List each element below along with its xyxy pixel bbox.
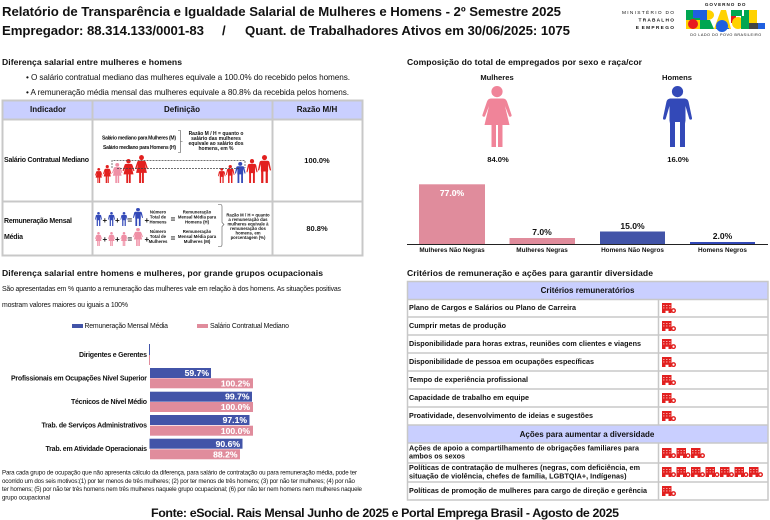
logo: ministério do trabalho e emprego: T R A B A L H O [639,18,674,24]
footnote: ter homens; (5) por não ter três homens nem três mulheres naquele grupo ocupacional; (6) por não ter nem homens nem mulheres naquele [2,486,363,493]
row: remuneração mensal média: Mulheres [149,239,168,244]
values [185,368,250,460]
row: remuneração mensal média: Mensal Média para [178,214,217,220]
row: salário contratual mediano: Salário Contratual Mediano [4,157,89,164]
pictogram: mulheres 84%: 84.0% [487,155,509,164]
legend: Remuneração Mensal Média [84,323,168,330]
table header [30,105,337,114]
row: remuneração mensal média: a remuneração das [228,217,268,222]
values: 100.0% [221,402,250,412]
pictogram: mulheres: + [102,235,108,244]
bar chart: sexo e raça/cor: Mulheres Não Negras [419,247,485,254]
row: remuneração mensal média: Homens (H) [185,220,210,224]
section: diferença salarial: • O salário contratual mediano das mulheres equivale a 100.0% do recebido pelos homens. [26,73,350,82]
section: critérios: Critérios de remuneração e ações para garantir diversidade [407,268,653,278]
bar chart: sexo e raça/cor: 7.0% [532,227,552,237]
values: 90.6% [216,439,240,449]
action rows [409,444,648,495]
table header: Indicador [30,105,66,114]
row: remuneração mensal média: Mulheres (M) [184,239,211,244]
bar chart: sexo e raça/cor: Mulheres Negras [516,247,568,254]
row: remuneração mensal média: Média [4,234,23,241]
criteria rows: Disponibilidade para horas extras, reuniões com clientes e viagens [409,339,641,348]
footnote: grupo ocupacional [2,494,50,502]
section: diferença salarial [2,57,350,97]
pictogram: mulheres 84% [480,73,514,164]
pictogram: mulheres: + [144,235,150,244]
row: remuneração mensal média: Remuneração [183,210,212,214]
pictogram: mulheres 84%: Mulheres [480,73,514,82]
row: remuneração mensal média: Número [150,210,166,214]
criteria rows: Proatividade, desenvolvimento de ideias e sugestões [409,411,593,420]
bar chart: grupos ocupacionais [11,344,253,460]
bar chart: sexo e raça/cor: Homens Negros [698,247,747,254]
bar chart: sexo e raça/cor: 15.0% [620,221,645,231]
pictogram: homens: = [128,216,132,225]
header: critérios remuneratórios: Critérios remuneratórios [541,286,635,295]
row: remuneração mensal média: = [171,234,176,243]
row: salário contratual mediano: 100.0% [304,156,330,165]
action rows: Políticas de promoção de mulheres para cargo de direção e gerência [409,486,648,495]
row: salário contratual mediano: salário das mulheres [191,136,241,142]
icons: ações [662,448,762,496]
section: grupos ocupacionais: São apresentadas em % quanto a remuneração das mulheres vale em relação à dos homens. As situações positivas [2,286,342,293]
bar chart: sexo e raça/cor: Homens Não Negros [601,247,664,254]
footnote: Para cada grupo de ocupação que não apresenta cálculo da diferença, para salário de contratação ou para remuneração média, pode ter [2,470,357,476]
categories: Dirigentes e Gerentes [79,352,147,359]
action rows: Ações de apoio a compartilhamento de obrigações familiares para [409,444,640,452]
pictogram: salários medianos [95,155,271,183]
row: remuneração mensal média: porcentagem (%) [231,235,266,240]
pictogram: homens [95,208,150,226]
row: remuneração mensal média: mulheres equivale à [227,222,269,226]
bar chart: sexo e raça/cor [407,184,768,254]
row: salário contratual mediano: Salário mediano para Mulheres (M) [102,136,176,142]
section: diferença salarial: • A remuneração média mensal das mulheres equivale a 80.8% da recebida pelos homens. [26,88,349,97]
action rows: situação de violência, chefes de família, LGBTQIA+, Indígenas) [409,472,627,480]
row: salário contratual mediano: Salário mediano para Homens (H) [103,145,176,151]
criteria rows: Tempo de experiência profissional [409,375,528,384]
row: remuneração mensal média: 80.8% [306,224,328,233]
legend [72,323,289,330]
footnote [2,470,363,502]
footnote: ocorrido um dos seis motivos:(1) por ter menos de três mulheres; (2) por ter menos de três homens; (3) por não ter mulheres; (4) por não [2,478,356,485]
pictogram: mulheres: + [115,235,120,244]
row: remuneração mensal média [4,204,328,246]
pictogram: mulheres: = [128,235,132,244]
row: salário contratual mediano: homens, em % [198,146,234,152]
bars [150,368,253,459]
pictogram: homens 16%: Homens [662,73,692,82]
row: remuneração mensal média: = [171,215,176,224]
table header: Razão M/H [297,105,337,114]
table: critérios remuneratórios e ações [407,281,768,500]
pictogram: mulheres [95,228,150,246]
row: remuneração mensal média: homens, em [235,230,261,236]
row: salário contratual mediano: Razão M / H = quanto o [189,131,243,137]
row: remuneração mensal média: Mensal Média para [178,234,217,239]
row: remuneração mensal média: Remuneração [183,229,212,234]
pictogram: homens: + [115,216,120,225]
row: remuneração mensal média: Total de [150,234,167,239]
row: remuneração mensal média: Razão M / H = quanto [226,212,270,218]
action rows: ambos os sexos [409,452,465,460]
values: 97.1% [223,415,247,425]
title: Relatório de Transparência e Igualdade Salarial de Mulheres e Homens - 2º Semestre 2025 [2,4,561,19]
section: grupos ocupacionais: mostram valores maiores ou iguais a 100% [2,302,128,309]
row: salário contratual mediano [4,130,330,183]
criteria rows: Capacidade de trabalho em equipe [409,393,529,402]
logo: ministério do trabalho e emprego: E E M P R E G O [636,25,674,31]
legend: Salário Contratual Mediano [210,323,289,330]
values: 59.7% [185,368,209,378]
pictogram: homens: + [102,216,108,225]
criteria rows: Cumprir metas de produção [409,321,507,330]
criteria rows: Plano de Cargos e Salários ou Plano de Carreira [409,303,577,312]
section: diferença salarial: Diferença salarial entre mulheres e homens [2,57,182,67]
section: grupos ocupacionais [2,268,342,309]
categories [11,352,147,453]
title: Quant. de Trabalhadores Ativos em 30/06/2025: 1075 [245,23,570,38]
title: / [222,23,226,38]
criteria rows [409,303,641,420]
categories: Trab. em Atividade Operacionais [46,446,147,453]
section: grupos ocupacionais: Diferença salarial entre homens e mulheres, por grande grupos ocupacionais [2,268,323,278]
categories: Profissionais em Ocupações Nível Superior [11,376,147,382]
table header: Definição [164,105,200,114]
pictogram: homens 16% [662,73,692,164]
row: remuneração mensal média: Remuneração Mensal [4,218,72,225]
row: salário contratual mediano: equivale ao salário dos [188,141,244,147]
row: remuneração mensal média: Número [150,229,166,234]
title: Empregador: 88.314.133/0001-83 [2,23,204,38]
logo: governo do brasil: GOVERNO DO [705,2,747,7]
values: 99.7% [225,392,250,402]
logo: ministério do trabalho e emprego: MINISTÉRIO DO [622,9,674,16]
logo: governo do brasil [686,2,765,37]
row: remuneração mensal média: remuneração dos [230,226,267,231]
bar chart: sexo e raça/cor: 77.0% [440,188,465,198]
action rows: Políticas de contratação de mulheres (negras, com deficiência, em [409,463,640,472]
categories: Trab. de Serviços Administrativos [42,422,147,430]
table: indicadores [2,100,363,256]
section: composição: Composição do total de empregados por sexo e raça/cor [407,57,643,67]
title [2,4,570,38]
header: ações: Ações para aumentar a diversidade [520,430,655,439]
logo: ministério do trabalho e emprego [622,9,674,31]
source: Fonte: eSocial. Rais Mensal Junho de 2025 e Portal Emprega Brasil - Agosto de 2025 [151,506,619,520]
row: remuneração mensal média: Homens [150,220,167,224]
values: 88.2% [213,450,238,460]
pictogram: homens: + [144,216,150,225]
logo: governo do brasil: DO LADO DO POVO BRASILEIRO [690,33,761,37]
row: remuneração mensal média: Total de [150,214,167,220]
icons: critérios [662,303,675,421]
bar chart: sexo e raça/cor: 2.0% [713,231,733,241]
values: 100.0% [221,426,250,436]
values: 100.2% [221,378,250,388]
categories: Técnicos de Nível Médio [71,399,147,406]
criteria rows: Disponibilidade de pessoa em ocupações específicas [409,357,594,366]
pictogram: homens 16%: 16.0% [667,155,689,164]
